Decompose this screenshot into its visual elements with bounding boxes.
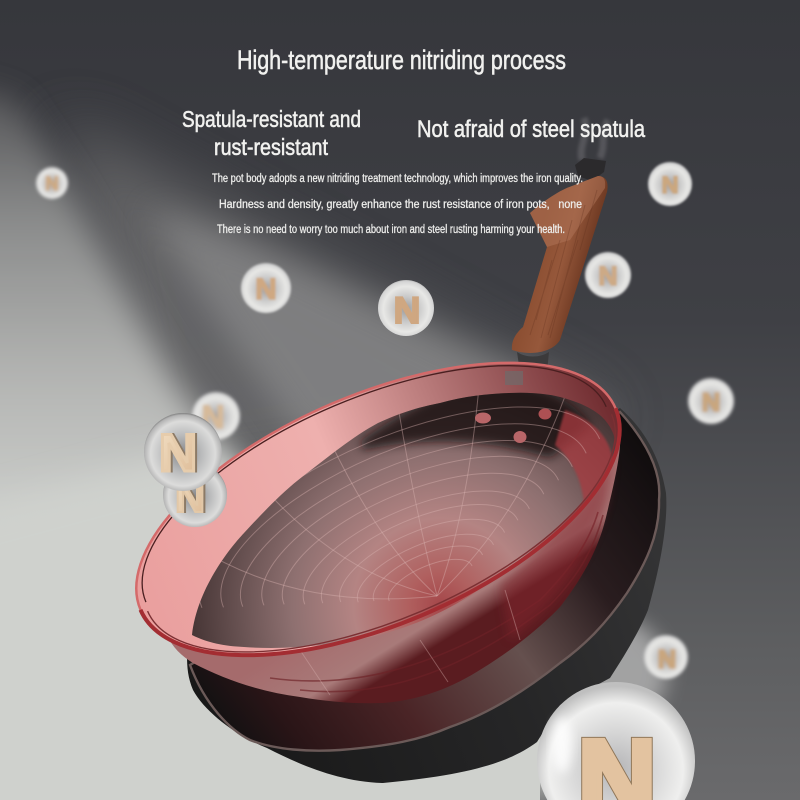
body text: The pot body adopts a new nitriding treatment technology, which improves the iron quality.: [212, 173, 583, 185]
ball: cluster upper: N: [161, 424, 199, 483]
ball: far left blurred: [36, 167, 68, 199]
ball: upper left: N: [255, 273, 277, 306]
red right wall: [554, 409, 612, 500]
handle: [512, 118, 608, 372]
rim band: [96, 302, 660, 716]
ball: cluster lower: N: [177, 474, 207, 521]
transparent red liner: [135, 362, 622, 704]
pan outer body: [187, 408, 666, 783]
rim inner dark line: [104, 308, 606, 602]
grid and shading: [200, 392, 612, 608]
wall red section right: [500, 460, 612, 640]
ball: upper right blurred: [648, 162, 692, 206]
inner bowl: [192, 393, 615, 648]
ball: lower right blurred: N: [658, 644, 676, 674]
smoke wisps: [581, 118, 608, 160]
ball: behind left cluster: N: [201, 399, 225, 435]
title: High-temperature nitriding process: [237, 45, 566, 75]
ferrule: [517, 352, 549, 372]
light wood wedge: [530, 176, 605, 247]
heading: spatula-resistant: [182, 106, 361, 160]
handle tip: [575, 158, 606, 181]
ball: beside handle: N: [598, 261, 618, 291]
dark inner edge: [148, 414, 653, 710]
ball: behind left cluster: [192, 392, 240, 440]
ball: lower right blurred: [644, 635, 688, 679]
ball: beside handle: [585, 252, 631, 298]
heading: steel spatula: Not afraid of steel spatula: [417, 116, 646, 143]
rivets: [475, 408, 552, 443]
body text: [212, 173, 583, 236]
ball: cluster upper: N: [159, 424, 197, 483]
ball: large bottom: [537, 682, 695, 800]
dark upper glare: [362, 382, 590, 458]
ball: upper centre: N: [394, 290, 420, 331]
black pan: [187, 408, 666, 783]
wood grain: [530, 190, 597, 338]
heading: spatula-resistant: Spatula-resistant and: [182, 106, 361, 132]
ball: upper centre: [378, 280, 434, 336]
heading: spatula-resistant: rust-resistant: [214, 134, 329, 160]
wall bands: [270, 512, 603, 692]
ball: cluster upper: [144, 413, 222, 491]
outer rim ellipse: [96, 302, 660, 716]
body text: There is no need to worry too much about iron and steel rusting harming your health.: [217, 224, 565, 236]
thick lower rim: [141, 408, 660, 716]
pan inner surface: [190, 412, 659, 751]
handle bracket seen through rim: [505, 371, 523, 385]
ball: right blurred: [688, 378, 734, 424]
front rim gloss: [141, 408, 660, 716]
front wall below rim: [165, 430, 620, 703]
ball: right blurred: N: [702, 387, 720, 417]
ball: cluster lower: N: [175, 474, 205, 521]
body text: Hardness and density, greatly enhance the rust resistance of iron pots, none: [219, 199, 582, 211]
ball: cluster lower: [163, 463, 227, 527]
ball: upper left: [241, 263, 291, 313]
wall grid: [300, 590, 520, 695]
ball: upper right blurred: N: [661, 172, 679, 199]
ball: far left blurred: N: [45, 174, 59, 195]
grid lines: [200, 396, 600, 608]
wooden grip: [512, 176, 608, 353]
